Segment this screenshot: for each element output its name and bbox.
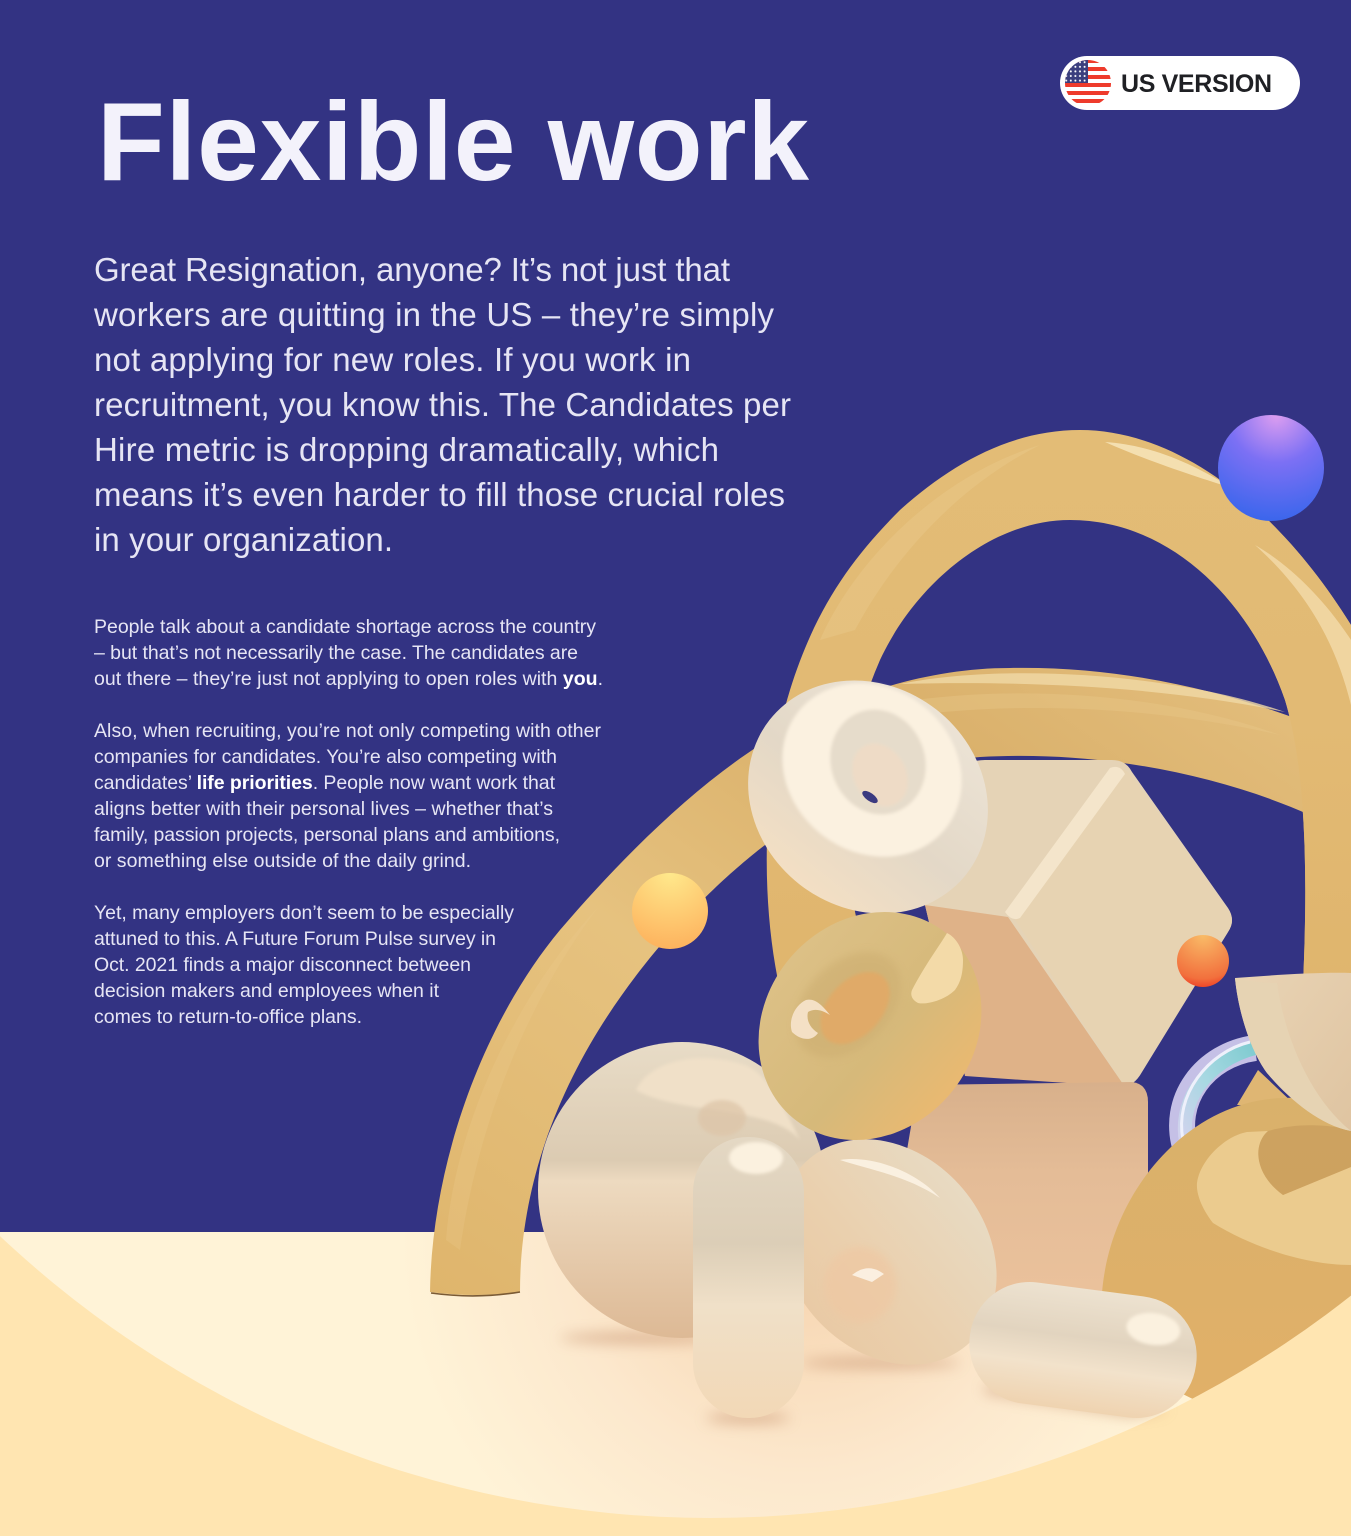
box xyxy=(880,1082,1148,1310)
icon: US flag xyxy=(1065,60,1111,103)
gold sphere xyxy=(1102,1070,1351,1400)
body paragraph: life priorities: family, passion projects, personal plans and ambitions, xyxy=(94,824,560,846)
body paragraph: life priorities: aligns better with their personal lives – whether that’s xyxy=(94,798,553,820)
bowl xyxy=(1235,973,1351,1131)
intro paragraph: recruitment, you know this. The Candidates per xyxy=(94,386,791,423)
gold donut xyxy=(712,867,1028,1185)
arch: right overlap xyxy=(1225,520,1351,974)
body paragraph: life priorities: or something else outside of the daily grind. xyxy=(94,850,471,872)
orange ball xyxy=(1177,935,1229,987)
body paragraph: candidate shortage: People talk about a candidate shortage across the country xyxy=(94,616,596,638)
intro paragraph: Great Resignation, anyone? It’s not just that xyxy=(94,251,730,288)
ball: yellow xyxy=(632,873,708,949)
intro paragraph: means it’s even harder to fill those crucial roles xyxy=(94,476,785,513)
title: Flexible work xyxy=(97,80,809,204)
intro paragraph xyxy=(93,251,791,558)
intro paragraph: Hire metric is dropping dramatically, which xyxy=(94,431,719,468)
body paragraph: survey xyxy=(94,902,514,1028)
horizontal pill xyxy=(962,1275,1204,1425)
floor band xyxy=(0,1232,1351,1536)
intro paragraph: workers are quitting in the US – they’re simply xyxy=(93,296,774,333)
intro paragraph: not applying for new roles. If you work in xyxy=(94,341,691,378)
cube xyxy=(925,760,1232,1087)
body paragraph: survey: comes to return-to-office plans. xyxy=(94,1006,362,1028)
body paragraph: candidate shortage xyxy=(94,616,603,690)
3D illustration xyxy=(430,415,1351,1425)
body paragraph: survey: Oct. 2021 finds a major disconnect between xyxy=(94,954,471,976)
body paragraph: life priorities xyxy=(94,720,602,872)
iridescent ring xyxy=(1182,1042,1255,1150)
highlight on arch right xyxy=(1255,545,1351,705)
arch: back xyxy=(767,430,1351,990)
vertical pill xyxy=(693,1137,804,1418)
body paragraph: candidate shortage: out there – they’re just not applying to open roles with you. xyxy=(94,668,603,690)
body paragraph: life priorities: candidates’ life priorities. People now want work that xyxy=(94,772,556,794)
ball: blue xyxy=(1218,415,1324,521)
big sphere xyxy=(538,1042,826,1338)
blob xyxy=(735,1096,1041,1408)
arch: front xyxy=(430,668,1310,1296)
badge: US version xyxy=(1060,56,1300,110)
body paragraph: life priorities: companies for candidates. You’re also competing with xyxy=(94,746,557,768)
floor shadows xyxy=(560,1333,1170,1423)
badge label: US VERSION xyxy=(1121,70,1272,98)
body paragraph: candidate shortage: – but that’s not necessarily the case. The candidates are xyxy=(94,642,578,664)
floor spotlight xyxy=(0,1232,1351,1536)
body paragraph: survey: attuned to this. A Future Forum Pulse survey in xyxy=(94,928,496,950)
body paragraph: life priorities: Also, when recruiting, you’re not only competing with other xyxy=(94,720,602,742)
cream donut xyxy=(701,633,1035,961)
body paragraph: survey: Yet, many employers don’t seem to be especially xyxy=(94,902,514,924)
body paragraph: survey: decision makers and employees when it xyxy=(94,980,440,1002)
intro paragraph: in your organization. xyxy=(94,521,393,558)
